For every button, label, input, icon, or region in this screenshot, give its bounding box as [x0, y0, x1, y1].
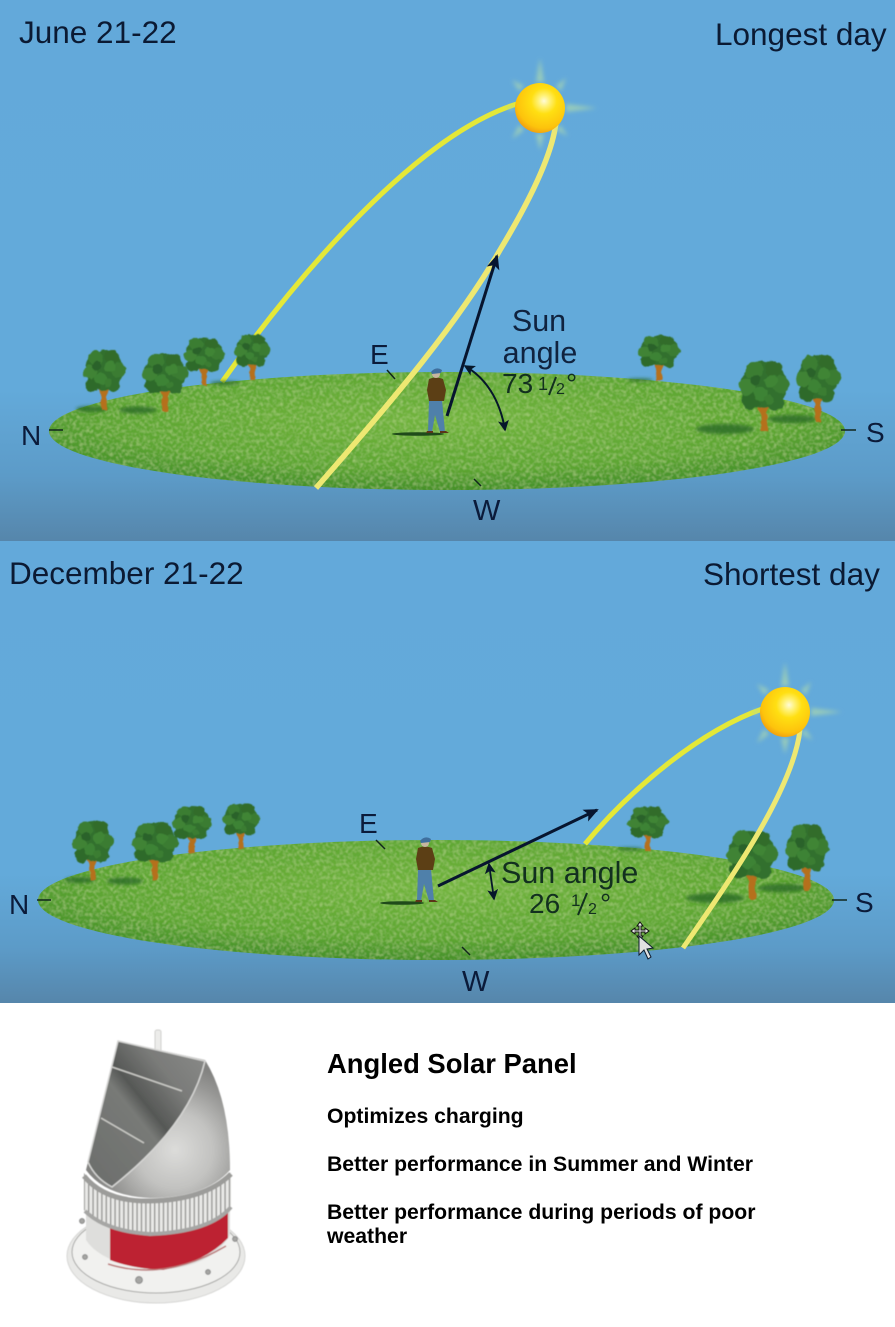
- screws: [80, 1218, 238, 1284]
- compass labels: E: [370, 339, 389, 370]
- heading: Shortest day: Shortest day: [703, 556, 880, 592]
- solar panel: [88, 1041, 205, 1187]
- label: sun angle: 26: [529, 888, 560, 919]
- tree shadows: [76, 378, 816, 434]
- benefit: summer and winter: Better performance in Summer and Winter: [327, 1153, 753, 1176]
- ground disc: [38, 840, 834, 960]
- sun: [506, 58, 597, 150]
- trees, south side: [638, 335, 840, 431]
- sun angle arrow: [438, 810, 597, 886]
- label: sun angle: [501, 856, 638, 919]
- antenna: [155, 1030, 161, 1052]
- person: [380, 837, 438, 905]
- person: [392, 368, 449, 436]
- benefit: optimizes charging: Optimizes charging: [327, 1105, 524, 1128]
- label: sun angle: 73: [502, 368, 533, 399]
- panel: June 21-22 sun path: [0, 0, 895, 541]
- product photo: solar beacon: [67, 1030, 245, 1303]
- panel: December 21-22 sun path: [0, 541, 895, 1003]
- label: sun angle: angle: [503, 336, 577, 370]
- benefit: poor weather: weather: [326, 1225, 407, 1248]
- trees, north side: [83, 334, 270, 411]
- trees, south side: [628, 807, 829, 899]
- angle arc arrow: [465, 366, 505, 430]
- compass labels: [21, 339, 885, 527]
- setting sun path: [316, 122, 556, 488]
- label: sun angle: 1: [538, 374, 548, 394]
- compass labels: [9, 808, 874, 998]
- trees, north side: [72, 803, 260, 881]
- panel: angled solar panel product: [0, 1003, 895, 1327]
- heading: December 21-22: December 21-22: [9, 555, 244, 591]
- compass labels: W: [473, 495, 501, 527]
- sun: [751, 662, 842, 754]
- label: sun angle: 1: [571, 891, 580, 910]
- compass labels: S: [855, 887, 874, 918]
- angle arrows: [489, 864, 494, 899]
- compass labels: S: [866, 417, 885, 448]
- sun angle arrow: [447, 256, 497, 416]
- heading: Longest day: Longest day: [715, 16, 887, 52]
- compass labels: N: [9, 889, 29, 920]
- compass labels: N: [21, 420, 41, 451]
- dome: [86, 1041, 230, 1198]
- base plate: [67, 1209, 245, 1303]
- heading: June 21-22: June 21-22: [19, 14, 177, 50]
- label: sun angle: °: [566, 368, 577, 399]
- label: sun angle: °: [600, 888, 611, 919]
- label: sun angle: Sun: [512, 304, 566, 338]
- label: sun angle: 2: [556, 381, 565, 398]
- compass labels: W: [462, 966, 490, 998]
- label: sun angle: 2: [588, 901, 597, 918]
- rising sun path: [222, 103, 520, 382]
- label: sun angle: [502, 304, 577, 399]
- compass labels: E: [359, 808, 378, 839]
- ground disc: [49, 372, 845, 490]
- setting sun path: [683, 730, 800, 948]
- icon: mouse cursor: [631, 922, 653, 959]
- rising sun path: [585, 708, 765, 844]
- benefit: poor weather: [326, 1201, 756, 1248]
- tree shadows: [65, 847, 806, 903]
- title: Angled Solar Panel: Angled Solar Panel: [327, 1048, 577, 1079]
- body: [86, 1200, 230, 1270]
- finned ring: [84, 1172, 231, 1234]
- red lens: [110, 1205, 228, 1270]
- benefit: poor weather: Better performance during periods of poor: [327, 1201, 756, 1224]
- label: sun angle: Sun angle: [501, 856, 638, 890]
